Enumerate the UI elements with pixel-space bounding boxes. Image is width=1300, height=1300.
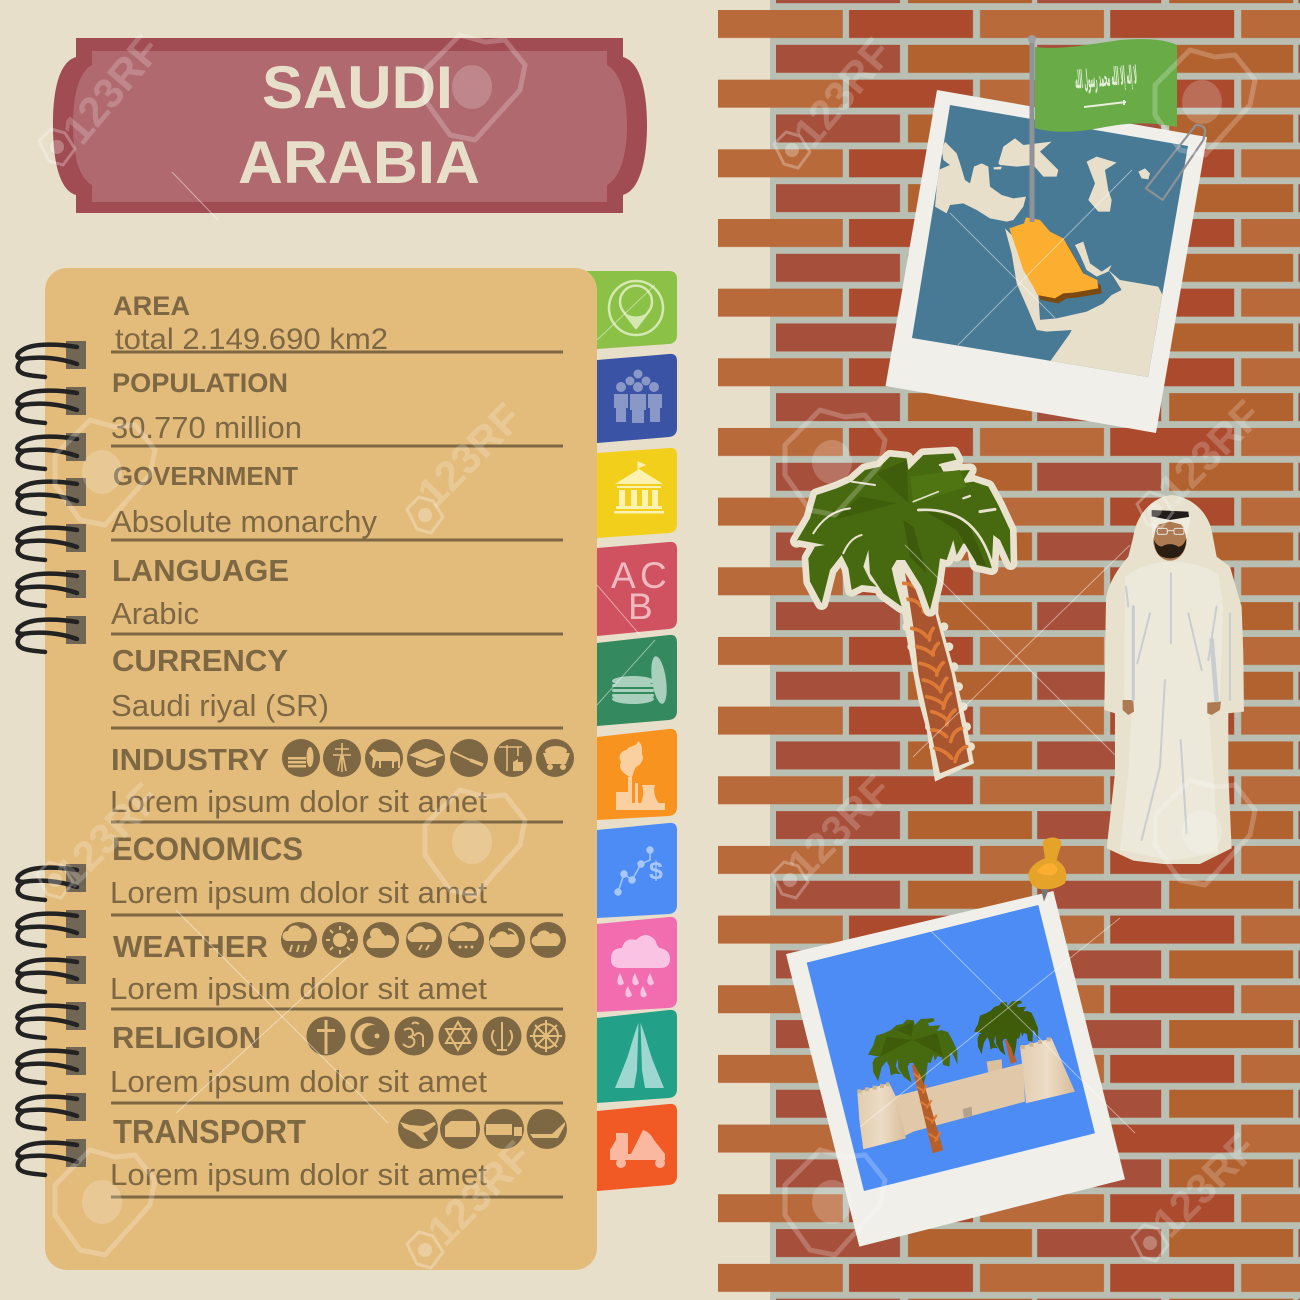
- row: government: [111, 461, 563, 540]
- row: language: [111, 553, 563, 634]
- tab: area: [587, 271, 677, 349]
- row: currency: Saudi riyal (SR): [111, 688, 329, 723]
- spiral binding bottom: [17, 864, 86, 1175]
- watermark overlay: 123RF: [784, 29, 901, 156]
- title plaque: [53, 38, 647, 213]
- watermark overlay: 123RF: [778, 766, 901, 888]
- row: population: [111, 368, 563, 446]
- row: industry: INDUSTRY: [111, 742, 269, 777]
- religion icons: [306, 1016, 566, 1056]
- row: weather: Lorem ipsum dolor sit amet: [110, 971, 487, 1006]
- face: [1150, 510, 1191, 561]
- palm crown: [797, 453, 1011, 610]
- watermark overlay: 123RF: [46, 774, 169, 896]
- title plaque: SAUDI: [262, 54, 453, 121]
- man in traditional dress: [1104, 495, 1244, 864]
- flag cloth: [1035, 39, 1177, 132]
- row: language: LANGUAGE: [112, 553, 289, 588]
- hands: [1123, 700, 1221, 715]
- spiral binding top: [17, 341, 86, 652]
- row: weather: WEATHER: [113, 929, 268, 964]
- palm trunk: [897, 562, 975, 782]
- tab: economics: $: [649, 857, 663, 885]
- row: economics: Lorem ipsum dolor sit amet: [110, 875, 487, 910]
- tab: population: [597, 354, 677, 443]
- row: population: 30.770 million: [111, 410, 302, 445]
- row: language: Arabic: [111, 596, 199, 631]
- tab: economics: [597, 823, 677, 918]
- row: transport: TRANSPORT: [113, 1113, 306, 1150]
- tab: weather: [597, 917, 677, 1012]
- tab: industry: [597, 729, 677, 820]
- tab: transport: [597, 1104, 677, 1191]
- row: transport: [110, 1109, 567, 1197]
- row: area: [111, 291, 563, 356]
- back palm: [974, 1001, 1038, 1064]
- tab: currency: [597, 635, 677, 726]
- watermark overlay: 123RF: [53, 26, 170, 153]
- push pin: [1028, 837, 1066, 902]
- transport icons: [398, 1109, 567, 1149]
- map land and country: [935, 138, 1163, 378]
- watermark overlay: 123RF: [408, 394, 531, 516]
- tab: government: [597, 448, 677, 538]
- robe: [1120, 562, 1223, 861]
- cloak: [1104, 495, 1244, 864]
- industry icons: [282, 739, 574, 777]
- row: currency: CURRENCY: [112, 643, 288, 678]
- colored index tabs: [587, 271, 677, 1191]
- row: government: GOVERNMENT: [113, 461, 298, 491]
- flag pole: [1028, 35, 1036, 222]
- castle polaroid: [786, 891, 1125, 1247]
- flag on pole: [1028, 35, 1177, 222]
- tab: language: [597, 542, 677, 636]
- map polaroid: [886, 90, 1207, 433]
- row: currency: [111, 643, 563, 728]
- row: religion: [110, 1016, 566, 1103]
- palm tree sticker: [797, 453, 1011, 782]
- row: transport: Lorem ipsum dolor sit amet: [110, 1157, 487, 1192]
- title plaque: ARABIA: [238, 129, 480, 196]
- tab: language: C: [640, 555, 667, 596]
- row: population: POPULATION: [112, 368, 288, 398]
- row: industry: Lorem ipsum dolor sit amet: [110, 784, 487, 819]
- row: religion: Lorem ipsum dolor sit amet: [110, 1064, 487, 1099]
- row: economics: ECONOMICS: [112, 831, 303, 867]
- row: economics: [110, 831, 563, 915]
- tab: language: A: [611, 555, 636, 596]
- tab: religion: [597, 1010, 677, 1103]
- watermark overlay: 123RF: [418, 1132, 541, 1254]
- row: religion: RELIGION: [112, 1020, 261, 1055]
- thin watermark lines: [172, 170, 1135, 1133]
- watermark overlay: 123RF: [1143, 1124, 1266, 1246]
- tab: language: B: [628, 586, 653, 627]
- row: industry: [110, 739, 574, 822]
- row: area: AREA: [113, 291, 190, 321]
- notebook panel: [45, 268, 597, 1270]
- row: weather: [110, 922, 566, 1009]
- paperclip: [1146, 125, 1205, 200]
- robe folds: [1126, 573, 1230, 840]
- weather icons: [281, 922, 566, 958]
- castle: [857, 1037, 1075, 1149]
- watermark overlay: 123RF: [1148, 391, 1271, 513]
- row: area: total 2.149.690 km2: [115, 323, 388, 356]
- row: government: Absolute monarchy: [111, 504, 377, 539]
- front palm: [868, 1018, 958, 1153]
